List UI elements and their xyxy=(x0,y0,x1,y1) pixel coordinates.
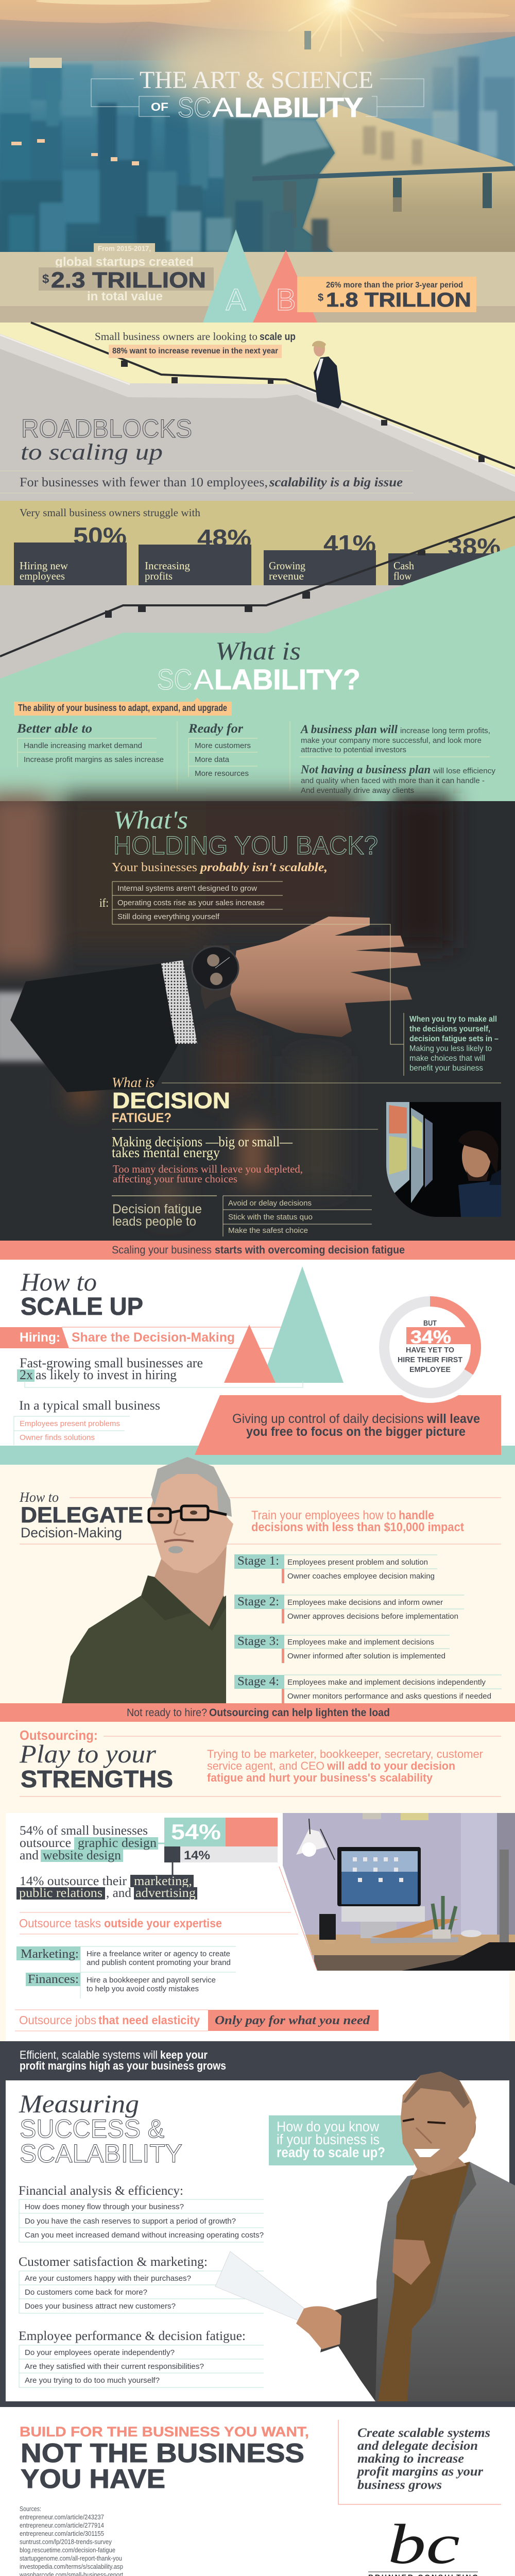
heading xyxy=(157,636,360,696)
heading: roadblocks: to scaling up xyxy=(21,439,163,465)
text: mental energy xyxy=(112,1134,303,1185)
title: A xyxy=(212,92,234,123)
text: scale up: 88% want to increase revenue in the next year xyxy=(112,347,278,355)
heading: DELEGATE xyxy=(21,1503,143,1528)
list: typical small business: Employees present problems xyxy=(20,1419,120,1428)
checklist: financial: Do you have the cash reserves to support a period of growth? xyxy=(25,2217,236,2226)
text: 2x likely xyxy=(17,1355,303,1387)
photo: hand xyxy=(230,917,421,1037)
sources: entrepreneur.com/article/301155 xyxy=(20,2530,104,2537)
text: outside your expertise: Outsource tasks xyxy=(19,1917,101,1930)
heading xyxy=(19,2089,182,2168)
donut chart: 34% xyxy=(384,1301,476,1393)
heading: SUCCESS & xyxy=(20,2114,164,2143)
heading xyxy=(19,1489,143,1540)
section: hero city photo xyxy=(0,0,515,252)
stat: $2.3 trillion: global startups created xyxy=(55,255,194,269)
list: better able to: Handle increasing market demand xyxy=(24,741,142,750)
text: trying to be: Trying to be marketer, bookkeeper, secretary, customer xyxy=(207,1748,483,1760)
bridge xyxy=(252,168,515,228)
text: outside your expertise: outside your expertise xyxy=(104,1917,222,1930)
heading: What's xyxy=(113,805,188,834)
band: outsourcing: Not ready to hire? xyxy=(127,1707,207,1719)
sources: blog.rescuetime.com/decision-fatigue xyxy=(20,2546,115,2554)
stage 2: Owner approves decisions before implementation xyxy=(287,1612,458,1621)
list: warning signs: Still doing everything yourself xyxy=(117,912,220,921)
checklist: financial xyxy=(19,2184,264,2242)
list: typical small business: Owner finds solutions xyxy=(20,1433,95,1442)
heading: roadblocks: ROADBLOCKS xyxy=(21,414,192,443)
heading: SCALE UP xyxy=(21,1293,143,1320)
stage 3: Stage 3: xyxy=(237,1635,279,1648)
heading: decision fatigue xyxy=(112,1075,501,1129)
list: marketing and finances: to help you avoid costly mistakes xyxy=(87,1985,199,1993)
checklist: customer: Does your business attract new customers? xyxy=(25,2302,176,2311)
list: ready for xyxy=(188,722,258,778)
text: create scalable systems: business grows xyxy=(357,2478,442,2492)
callout: giving up control xyxy=(195,1292,501,1455)
subheading: hiring xyxy=(0,1327,235,1348)
heading: decision fatigue: FATIGUE? xyxy=(112,1111,171,1125)
checklist: financial: Can you meet increased demand without increasing operating costs? xyxy=(25,2231,264,2240)
list: typical small business xyxy=(14,1399,160,1445)
text: train employees: handle xyxy=(399,1509,434,1522)
text: trying to be xyxy=(207,1748,483,1784)
list: typical small business: In a typical small business xyxy=(19,1399,160,1413)
text: mental energy: Making decisions —big or small— xyxy=(112,1134,293,1149)
band: overcoming decision fatigue: Scaling your business xyxy=(112,1244,212,1256)
stage 3: Employees make and implement decisions xyxy=(287,1638,434,1647)
text: decision fatigue note: Making you less likely to xyxy=(409,1044,492,1053)
text: 54% outsource: graphic design xyxy=(78,1836,157,1850)
text: business plan: make your company more successful, and look more xyxy=(301,736,482,745)
stage 2 xyxy=(234,1595,464,1623)
section: stairs photo xyxy=(0,323,515,685)
photo: man at vending machine xyxy=(386,1102,501,1217)
heading: NOT THE BUSINESS xyxy=(21,2438,304,2468)
bar: profits 48% xyxy=(139,524,251,585)
section: play to your strengths xyxy=(0,1722,515,2041)
callout: elasticity: Only pay for what you need xyxy=(215,2014,370,2027)
band: overcoming decision fatigue: starts with overcoming decision fatigue xyxy=(215,1244,405,1256)
checklist: customer: Do customers come back for more? xyxy=(25,2288,147,2297)
triangle A: A xyxy=(226,283,246,317)
checklist: customer: Are your customers happy with their purchases? xyxy=(25,2274,191,2283)
sources: startupgenome.com/all-report-thank-you xyxy=(20,2554,122,2562)
callout: ready to scale xyxy=(269,2115,414,2165)
bar: cash flow 38% xyxy=(388,533,501,585)
heading: roadblocks xyxy=(21,414,192,465)
text: decision fatigue note xyxy=(404,1013,499,1076)
checklist: employee xyxy=(19,2329,264,2387)
text: 14% outsource: public relations xyxy=(19,1886,102,1900)
checklist: customer: Customer satisfaction & marketing: xyxy=(19,2255,208,2269)
stage 4 xyxy=(234,1675,502,1703)
text: mental energy: affecting your future choices xyxy=(113,1173,237,1185)
heading xyxy=(112,805,378,874)
stat: $1.8 trillion: 26% more than the prior 3-year period xyxy=(326,281,463,290)
list: better able to: Increase profit margins as sales increase xyxy=(24,755,164,764)
text: trying to be: service agent, and CEO xyxy=(207,1759,324,1772)
text: decision fatigue note: make choices that will xyxy=(409,1054,485,1063)
callout: giving up control: you free to focus on the bigger picture xyxy=(246,1425,466,1439)
bar: profits 48%: 48% xyxy=(197,524,251,551)
text: big issue: scalability is a big issue xyxy=(269,476,403,489)
bar: hiring 50% xyxy=(14,522,127,585)
heading: YOU HAVE xyxy=(21,2464,165,2494)
title: SC xyxy=(178,92,211,123)
heading: LABILITY? xyxy=(214,663,360,696)
text: business plan: attractive to potential investors xyxy=(301,745,406,754)
checklist: customer xyxy=(19,2255,264,2313)
list: warning signs: Internal systems aren't designed to grow xyxy=(117,884,257,893)
handrail lower xyxy=(0,517,515,656)
text: trying to be: will add to your decision xyxy=(327,1759,455,1772)
text: 14% outsource: , and xyxy=(106,1886,131,1900)
heading: A xyxy=(194,663,214,696)
text: big issue: For businesses with fewer than 10 employees, xyxy=(20,476,268,489)
section: closing statement xyxy=(0,2407,515,2576)
callout: giving up control: Giving up control of daily decisions xyxy=(232,1412,424,1426)
heading: probably isn't scalable, xyxy=(199,861,328,874)
text: 54% outsource: website design xyxy=(43,1849,122,1862)
list: marketing and finances: Hire a bookkeeper and payroll service xyxy=(87,1976,216,1985)
stage 4: Owner monitors performance and asks questions if needed xyxy=(287,1692,491,1701)
bar: profits 48%: profits xyxy=(145,570,173,582)
band: outsourcing: Outsourcing can help lighten the load xyxy=(209,1707,390,1719)
text: efficient systems xyxy=(20,2048,226,2072)
text: business plan: Not having a business plan xyxy=(300,763,431,776)
list: ready for: More customers xyxy=(195,741,251,750)
list: better able to: Better able to xyxy=(16,722,92,736)
text: create scalable systems: and delegate decision xyxy=(357,2439,478,2453)
heading: HOLDING YOU BACK? xyxy=(113,831,378,860)
text: 2x likely: 2x xyxy=(20,1367,33,1382)
list: fatigue effects: Decision fatigue xyxy=(112,1202,202,1216)
checklist: financial: How does money flow through your business? xyxy=(25,2202,184,2211)
text: decision fatigue note: When you try to make all xyxy=(409,1015,497,1024)
list: fatigue effects: Stick with the status quo xyxy=(228,1213,313,1222)
text: 54% outsource xyxy=(20,1824,158,1862)
stat: $2.3 trillion: 2.3 TRILLION xyxy=(51,268,206,293)
logo: Brunner Consulting: bc xyxy=(388,2513,460,2575)
sources: entrepreneur.com/article/277914 xyxy=(20,2521,104,2529)
list: warning signs: if: xyxy=(99,896,109,909)
stage 2: Stage 2: xyxy=(237,1595,279,1608)
text: create scalable systems: profit margins as your xyxy=(356,2465,483,2479)
subheading: hiring: Hiring: xyxy=(20,1330,60,1345)
donut chart: 34%: EMPLOYEE xyxy=(409,1365,451,1374)
heading: Outsourcing: xyxy=(20,1727,98,1743)
list: marketing and finances: Finances: xyxy=(28,1973,79,1986)
section: how to delegate xyxy=(0,1457,515,1703)
stat: $1.8 trillion xyxy=(297,277,476,312)
list: ready for: More data xyxy=(195,755,230,764)
callout: ready to scale: if your business is xyxy=(277,2131,380,2147)
text: business plan: and quality when faced with more than it can handle - xyxy=(301,776,485,785)
photo: sleeve and watch xyxy=(0,945,237,1092)
sources: Sources: xyxy=(20,2505,41,2513)
band: overcoming decision fatigue xyxy=(0,1241,515,1260)
triangle A xyxy=(203,229,269,323)
list: fatigue effects: Avoid or delay decisions xyxy=(228,1199,312,1208)
heading xyxy=(19,1727,501,1797)
title: OF xyxy=(151,100,168,113)
text: outside your expertise xyxy=(19,1912,298,1934)
bar: hiring 50%: 50% xyxy=(73,522,127,549)
text: 2x likely: Fast-growing small businesses are xyxy=(20,1355,203,1370)
heading: SCALABILITY xyxy=(20,2139,182,2168)
heading: How to xyxy=(19,1489,59,1505)
triangles xyxy=(224,1266,344,1383)
callout: elasticity: Outsource jobs xyxy=(19,2013,96,2027)
list: marketing and finances: and publish content promoting your brand xyxy=(87,1958,231,1967)
text: 54% outsource: 54% of small businesses xyxy=(20,1824,148,1838)
checklist: employee: Do your employees operate independently? xyxy=(25,2348,175,2357)
photo: desk with computer xyxy=(283,1813,515,1971)
river xyxy=(302,105,515,252)
stage 1: Stage 1: xyxy=(237,1554,279,1568)
callout: definition xyxy=(14,698,232,716)
triangle B xyxy=(253,250,317,323)
section: stairs photo: Very small business owners struggle with xyxy=(20,506,200,519)
text: trying to be: fatigue and hurt your business's scalability xyxy=(207,1771,433,1784)
checklist: employee: Employee performance & decision fatigue: xyxy=(19,2329,246,2343)
section: startup value band xyxy=(0,229,515,323)
text: 14% outsource: 14% outsource their xyxy=(20,1874,127,1888)
stage 4: Employees make and implement decisions independently xyxy=(287,1678,486,1687)
bar: revenue 41%: revenue xyxy=(269,570,304,582)
list: fatigue effects: Make the safest choice xyxy=(228,1226,308,1235)
callout: giving up control: will leave xyxy=(426,1412,480,1426)
text: create scalable systems: Create scalable systems xyxy=(357,2426,490,2440)
heading: SC xyxy=(157,663,192,696)
list: marketing and finances xyxy=(16,1946,236,1998)
bar: revenue 41%: 41% xyxy=(323,530,376,557)
text: 14% outsource: advertising xyxy=(135,1886,196,1900)
bar: profits 48%: Increasing xyxy=(145,560,190,572)
list: marketing and finances: Marketing: xyxy=(21,1947,79,1961)
stat: $2.3 trillion xyxy=(39,244,214,303)
heading: decision fatigue: What is xyxy=(112,1075,154,1090)
text: decision fatigue note: benefit your business xyxy=(409,1064,483,1073)
text: business plan xyxy=(299,723,495,795)
section: what is scalability xyxy=(0,546,515,801)
text: train employees xyxy=(251,1509,464,1534)
bar: revenue 41% xyxy=(264,530,376,585)
list: fatigue effects: leads people to xyxy=(112,1214,196,1229)
bar: hiring 50%: Hiring new xyxy=(20,560,68,572)
text: business plan: A business plan will xyxy=(300,723,398,736)
list: ready for: Ready for xyxy=(188,722,243,736)
photo: smiling man in jacket xyxy=(215,2072,515,2401)
heading: BUILD FOR THE BUSINESS YOU WANT, xyxy=(20,2424,309,2439)
bar: cash flow 38%: flow xyxy=(393,570,412,582)
heading: decision fatigue: DECISION xyxy=(112,1088,230,1113)
section: how to scale up xyxy=(0,1260,515,1465)
stat: $1.8 trillion: 1.8 TRILLION xyxy=(326,289,471,311)
stat: $2.3 trillion: $ xyxy=(42,272,49,286)
section: measuring success xyxy=(0,2041,515,2407)
stat: $2.3 trillion: From 2015-2017, xyxy=(98,244,151,252)
list: ready for: More resources xyxy=(195,769,249,778)
chart: 54% and 14% xyxy=(158,1818,278,1876)
heading: STRENGTHS xyxy=(21,1766,173,1792)
text: create scalable systems: making to increase xyxy=(357,2452,464,2466)
donut chart: 34%: HIRE THEIR FIRST xyxy=(398,1355,462,1364)
heading xyxy=(20,2424,309,2494)
text: efficient systems: Efficient, scalable systems will xyxy=(20,2048,158,2061)
sources xyxy=(19,2505,330,2576)
text: mental energy: Too many decisions will leave you depleted, xyxy=(113,1163,303,1175)
heading: Decision-Making xyxy=(21,1525,122,1540)
text: decision fatigue note: the decisions yourself, xyxy=(409,1025,490,1033)
callout: ready to scale: ready to scale up? xyxy=(277,2144,385,2160)
text: create scalable systems xyxy=(338,2420,501,2504)
text: 2x likely: as likely to invest in hiring xyxy=(36,1367,177,1382)
sources: investopedia.com/terms/s/scalability.asp xyxy=(20,2563,123,2570)
title: THE ART & SCIENCE xyxy=(140,66,373,94)
callout: elasticity: that need elasticity xyxy=(98,2013,200,2027)
heading: Your businesses xyxy=(112,861,197,874)
title xyxy=(91,66,424,123)
chart: 54% and 14%: 14% xyxy=(184,1849,210,1862)
bar: cash flow 38%: Cash xyxy=(393,560,414,572)
bar: hiring 50%: employees xyxy=(20,570,65,582)
text: mental energy: takes mental energy xyxy=(112,1145,220,1160)
text: efficient systems: keep your xyxy=(160,2048,208,2061)
stat: $1.8 trillion: $ xyxy=(318,292,323,303)
heading: Measuring xyxy=(19,2089,139,2118)
text: 54% outsource: and xyxy=(20,1849,39,1862)
subheading: hiring: Share the Decision-Making xyxy=(72,1330,235,1345)
bar: revenue 41%: Growing xyxy=(269,560,305,572)
donut chart: 34%: BUT xyxy=(423,1319,437,1328)
stage 1: Owner coaches employee decision making xyxy=(287,1572,435,1581)
checklist: financial: Financial analysis & efficiency: xyxy=(19,2184,183,2198)
heading: How to xyxy=(20,1267,97,1296)
band: outsourcing xyxy=(0,1703,515,1722)
logo: Brunner Consulting xyxy=(368,2513,478,2576)
stage 1 xyxy=(234,1554,437,1583)
text: 14% outsource xyxy=(16,1874,197,1900)
text: big issue xyxy=(20,476,403,489)
donut chart: 34%: HAVE YET TO xyxy=(406,1346,454,1354)
chart: 54% and 14%: 54% xyxy=(171,1820,221,1844)
text: decision fatigue note: decision fatigue sets in – xyxy=(409,1035,499,1043)
stage 3: Owner informed after solution is implemented xyxy=(287,1652,445,1660)
sources: entrepreneur.com/article/243237 xyxy=(20,2513,104,2521)
icon: watch xyxy=(192,946,238,990)
stat: $2.3 trillion: in total value xyxy=(87,290,163,303)
triangle B: B xyxy=(276,283,296,317)
photo: man in polo shirt xyxy=(62,1457,233,1703)
text: scale up xyxy=(95,330,296,358)
stage 1: Employees present problem and solution xyxy=(287,1558,428,1567)
list: fatigue effects xyxy=(112,1196,372,1236)
text: business plan: will lose efficiency xyxy=(433,767,495,775)
list: marketing and finances: Hire a freelance writer or agency to create xyxy=(87,1950,230,1958)
text: efficient systems: profit margins high as your business grows xyxy=(20,2059,226,2072)
list: better able to xyxy=(16,722,164,767)
stage 2: Employees make decisions and inform owner xyxy=(287,1598,443,1607)
text: 54% outsource: outsource xyxy=(20,1836,71,1850)
callout: definition: The ability of your business to adapt, expand, and upgrade xyxy=(18,703,227,713)
donut chart: 34%: 34% xyxy=(410,1327,451,1347)
text: 14% outsource: marketing, xyxy=(134,1874,192,1888)
sun xyxy=(288,0,397,57)
heading xyxy=(20,1267,143,1320)
title: LABILITY xyxy=(234,92,363,123)
heading: What is xyxy=(215,636,301,665)
callout: elasticity xyxy=(15,2010,379,2031)
text: train employees: Train your employees how to xyxy=(251,1509,396,1522)
text: business plan: increase long term profits, xyxy=(400,726,490,735)
stage 3 xyxy=(234,1635,450,1663)
section: holding you back xyxy=(0,793,515,1241)
photo: businessman on stairs xyxy=(312,341,341,409)
list: warning signs xyxy=(99,882,404,1044)
stage 4: Stage 4: xyxy=(237,1675,279,1688)
callout: ready to scale: How do you know xyxy=(277,2119,380,2134)
sources: suntrust.com/lp/2018-trends-survey xyxy=(20,2538,112,2546)
bar: cash flow 38%: 38% xyxy=(448,533,501,560)
text: scale up: Small business owners are looking to xyxy=(95,330,258,343)
text: train employees: decisions with less than $10,000 impact xyxy=(251,1520,464,1534)
list: warning signs: Operating costs rise as your sales increase xyxy=(117,899,265,907)
checklist: employee: Are you trying to do too much yourself? xyxy=(25,2376,160,2385)
text: scale up: scale up xyxy=(260,331,296,343)
handrail upper xyxy=(31,323,515,468)
text: business plan: And eventually drive away clients xyxy=(301,786,414,795)
heading: Play to your xyxy=(19,1739,157,1768)
checklist: employee: Are they satisfied with their current responsibilities? xyxy=(25,2362,204,2371)
